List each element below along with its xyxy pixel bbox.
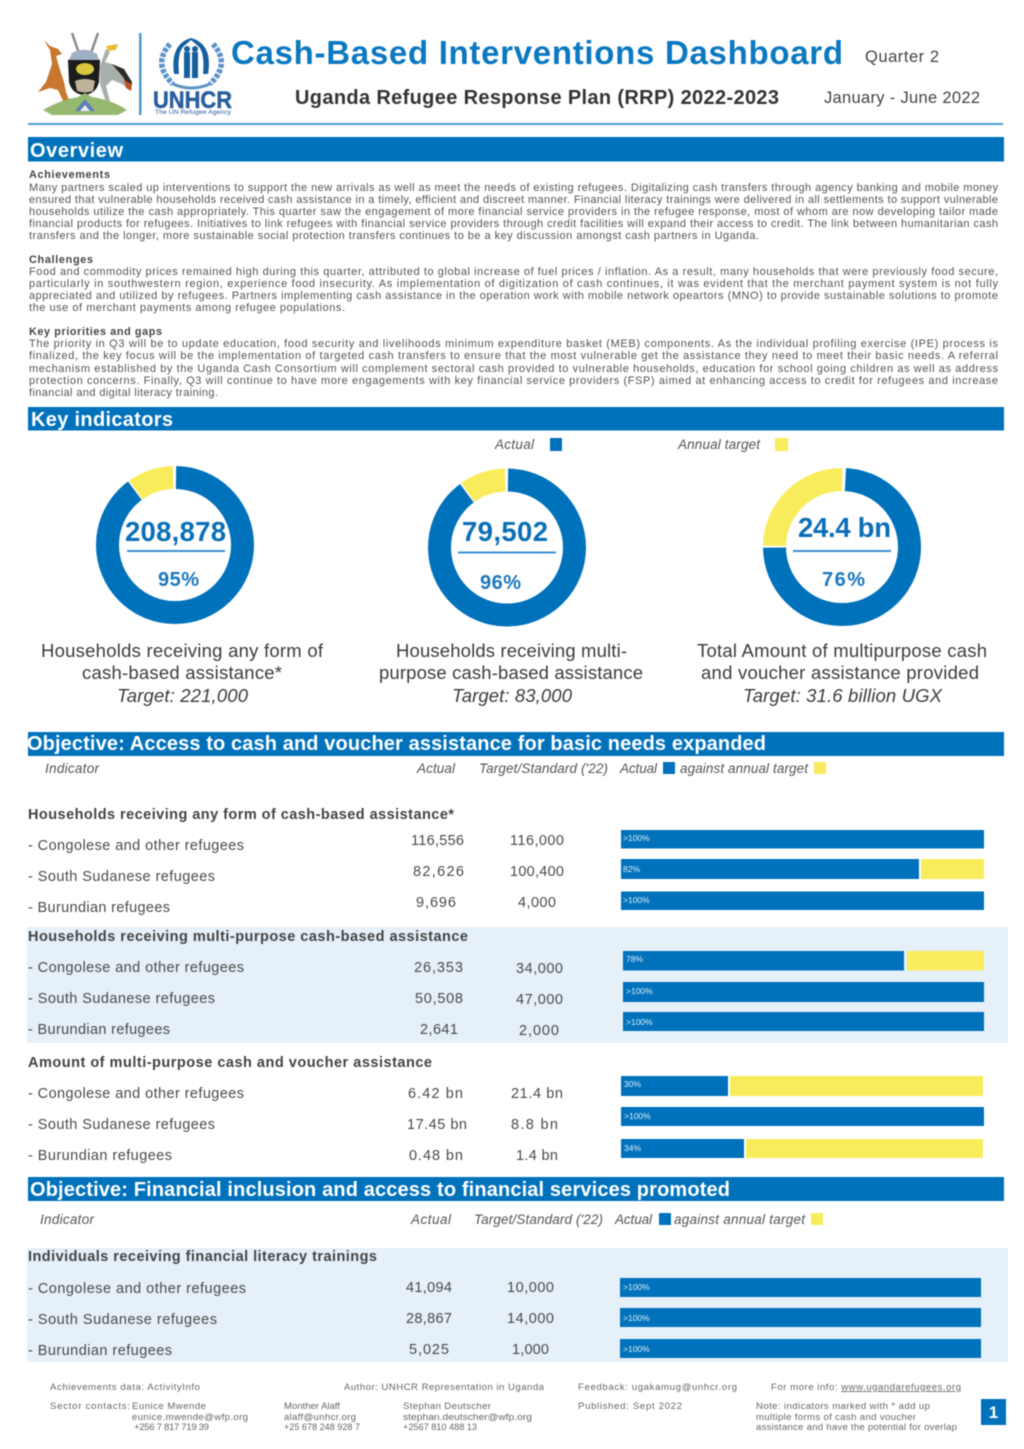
indicator group: households any form: 116,556 bbox=[411, 833, 464, 849]
indicator group: households any form: - Congolese and other refugees bbox=[28, 838, 244, 854]
legend: actual and annual target: Annual target bbox=[677, 437, 761, 452]
footer: note: assistance and have the potential for overlap bbox=[756, 1422, 957, 1433]
text block: key priorities and gaps: mechanism established by the Uganda Cash Consortium will complement sectoral cash provided to vulnerable households, education for school going children as well as address bbox=[29, 363, 999, 375]
footer: sources and links: Feedback: ugakamug@unhcr.org bbox=[578, 1382, 737, 1393]
indicator group: multi-purpose households: - Congolese and other refugees bbox=[28, 960, 244, 976]
heading: objective financial inclusion bbox=[28, 1177, 1004, 1201]
table header: Indicator bbox=[45, 761, 100, 776]
footer: note: multiple forms of cash and voucher bbox=[756, 1412, 917, 1423]
indicator group: financial literacy: 1,000 bbox=[512, 1342, 549, 1358]
heading: objective access to cash: Objective: Access to cash and voucher assistance for basic needs expanded bbox=[27, 733, 766, 755]
indicator group: financial literacy: 10,000 bbox=[507, 1280, 554, 1296]
indicator group: multi-purpose households: Households receiving multi-purpose cash-based assistance bbox=[28, 929, 468, 945]
legend: actual and annual target bbox=[494, 437, 788, 452]
indicator group: multi-purpose households: - South Sudanese refugees bbox=[28, 991, 215, 1007]
indicator group: financial literacy: - Burundian refugees bbox=[28, 1343, 172, 1359]
footer: sources and links: Author: UNHCR Representation in Uganda bbox=[344, 1382, 545, 1393]
donut: total amount: 24.4 bn bbox=[798, 512, 891, 543]
heading: objective financial inclusion: Objective: Financial inclusion and access to financial services promoted bbox=[30, 1179, 730, 1201]
table header bbox=[40, 1212, 823, 1227]
indicator group: multi-purpose households bbox=[28, 929, 984, 1039]
text block: achievements: Achievements bbox=[29, 169, 110, 181]
text block: challenges: appreciated and utilized by refugees. Partners implementing cash assistance in the operation work with mobile network opeartors (MNO) to provide sustainable solutions to promote bbox=[29, 290, 998, 302]
heading: key indicators: Key indicators bbox=[31, 409, 173, 431]
text block: key priorities and gaps: protection concerns. Finally, Q3 will continue to have more engagements with key financial service providers (FSP) aimed at enhancing access to credit for refugees and increase bbox=[29, 375, 998, 387]
indicator group: financial literacy: >100% bbox=[623, 1282, 650, 1292]
caption: multi-purpose households: Households receiving multi- bbox=[396, 640, 627, 661]
footer: sector contacts: alaff@unhcr.org bbox=[284, 1412, 356, 1423]
indicator group: households any form: 100,400 bbox=[510, 864, 564, 880]
text block: key priorities and gaps: financial and digital literacy training. bbox=[29, 387, 218, 399]
date range: January - June 2022 bbox=[824, 89, 980, 107]
indicator group: amount of assistance: - Burundian refugees bbox=[28, 1148, 172, 1164]
indicator group: multi-purpose households: 2,000 bbox=[519, 1023, 559, 1039]
caption: households any form: Target: 221,000 bbox=[117, 685, 249, 706]
title: Cash-Based Interventions Dashboard bbox=[231, 34, 843, 71]
table header: Indicator bbox=[40, 1212, 94, 1227]
indicator group: amount of assistance: 6.42 bn bbox=[408, 1086, 463, 1102]
panel: overview bbox=[28, 137, 1004, 399]
indicator group: households any form: 4,000 bbox=[518, 895, 556, 911]
caption: households any form: cash-based assistance* bbox=[82, 662, 282, 683]
footer: sector contacts: Sector contacts: bbox=[50, 1401, 130, 1412]
footer: sources and links: For more info: www.ugandarefugees.org bbox=[771, 1382, 961, 1393]
icon: Uganda coat of arms bbox=[38, 33, 132, 115]
indicator group: households any form: 82,626 bbox=[413, 864, 464, 880]
indicator group: financial literacy: >100% bbox=[623, 1344, 650, 1354]
indicator group: multi-purpose households: 34,000 bbox=[516, 961, 563, 977]
table header: Actual bbox=[614, 1212, 653, 1227]
indicator group: households any form: >100% bbox=[623, 833, 650, 843]
indicator group: households any form bbox=[28, 807, 984, 916]
subtitle: Uganda Refugee Response Plan (RRP) 2022-2023 bbox=[295, 87, 779, 109]
text block: key priorities and gaps: Key priorities and gaps bbox=[29, 326, 162, 338]
footer: note bbox=[756, 1401, 957, 1433]
caption: total amount: Target: 31.6 billion UGX bbox=[743, 685, 943, 706]
indicator group: multi-purpose households: 26,353 bbox=[414, 960, 463, 976]
caption: total amount: Total Amount of multipurpose cash bbox=[697, 640, 987, 661]
text block: challenges: particularly in southwestern region, experience food insecurity. As implementation of digitization of cash continues, it was evident that the merchant payment system is not fully bbox=[29, 278, 999, 290]
footer: sector contacts: +256 7 817 719 39 bbox=[134, 1422, 209, 1433]
table header: Actual bbox=[416, 761, 456, 776]
indicator group: multi-purpose households: 50,508 bbox=[415, 991, 463, 1007]
header bbox=[28, 33, 1003, 125]
table header: Target/Standard ('22) bbox=[479, 761, 608, 776]
footer: sector contacts: Monther Alaff bbox=[284, 1401, 340, 1412]
indicator group: amount of assistance: - South Sudanese refugees bbox=[28, 1117, 215, 1133]
donut: multi-purpose households: 79,502 bbox=[462, 516, 548, 547]
text block: key priorities and gaps: The priority in Q3 will be to update education, food security and livelihoods minimum expenditure basket (MEB) components. As the individual profiling exercise (IPE) process is bbox=[29, 338, 999, 350]
caption: households any form: Households receiving any form of bbox=[41, 640, 324, 661]
donut: multi-purpose households: 96% bbox=[480, 572, 521, 594]
table header: Target/Standard ('22) bbox=[474, 1212, 603, 1227]
text block: challenges: the use of merchant payments among refugee populations. bbox=[29, 302, 345, 314]
indicator group: financial literacy: - South Sudanese refugees bbox=[28, 1312, 217, 1328]
panel: objective financial inclusion bbox=[27, 1177, 1008, 1362]
heading: overview bbox=[28, 137, 1004, 162]
indicator group: amount of assistance: 30% bbox=[624, 1079, 641, 1089]
quarter label: Quarter 2 bbox=[865, 48, 939, 66]
indicator group: multi-purpose households: 2,641 bbox=[420, 1022, 458, 1038]
indicator group: amount of assistance: Amount of multi-purpose cash and voucher assistance bbox=[28, 1055, 432, 1071]
heading: overview: Overview bbox=[30, 140, 123, 162]
indicator group: multi-purpose households: - Burundian refugees bbox=[28, 1022, 170, 1038]
footer: sector contacts: +2567 810 488 13 bbox=[403, 1422, 477, 1433]
text block: achievements bbox=[29, 169, 999, 242]
text block: achievements: households utilize the cash appropriately. This quarter saw the engagement of more financial service providers in the refugee response, most of whom are now developing tailor made bbox=[29, 206, 998, 218]
donut: households any form: 208,878 bbox=[125, 516, 226, 547]
icon: UNHCR logo: UNHCR bbox=[153, 87, 232, 114]
text block: challenges: Challenges bbox=[29, 254, 93, 266]
text block: challenges bbox=[29, 254, 999, 314]
indicator group: amount of assistance: 17.45 bn bbox=[407, 1117, 467, 1133]
indicator group: households any form: Households receiving any form of cash-based assistance* bbox=[28, 807, 454, 823]
indicator group: households any form: 82% bbox=[623, 864, 640, 874]
indicator group: amount of assistance bbox=[28, 1055, 984, 1164]
footer: sector contacts: Eunice Mwende bbox=[132, 1401, 206, 1412]
text block: challenges: Food and commodity prices remained high during this quarter, attributed to global increase of fuel prices / inflation. As a result, many households that were previously food secure, bbox=[29, 266, 998, 278]
indicator group: amount of assistance: >100% bbox=[624, 1111, 651, 1121]
page number: 1 bbox=[989, 1403, 998, 1422]
indicator group: households any form: 116,000 bbox=[510, 833, 564, 849]
footer: sector contacts: eunice.mwende@wfp.org bbox=[132, 1412, 248, 1423]
icon: UNHCR logo: The UN Refugee Agency bbox=[155, 110, 231, 116]
indicator group: amount of assistance: 21.4 bn bbox=[511, 1086, 563, 1102]
caption: households any form bbox=[41, 640, 324, 706]
indicator group: multi-purpose households: 78% bbox=[626, 954, 643, 964]
footer: sources and links: Achievements data: ActivityInfo bbox=[50, 1382, 200, 1393]
indicator group: financial literacy: 28,867 bbox=[406, 1311, 452, 1327]
indicator group: financial literacy bbox=[28, 1249, 981, 1359]
donut: multi-purpose households bbox=[413, 453, 601, 642]
heading: key indicators bbox=[28, 407, 1004, 431]
footer: sector contacts: stephan.deutscher@wfp.org bbox=[403, 1412, 532, 1423]
indicator group: multi-purpose households: 47,000 bbox=[516, 992, 563, 1008]
caption: multi-purpose households: Target: 83,000 bbox=[452, 685, 573, 706]
donut: total amount: 76% bbox=[822, 569, 865, 591]
footer: published date: Published: Sept 2022 bbox=[578, 1401, 682, 1412]
footer: sector contacts: +25 678 248 928 7 bbox=[284, 1422, 360, 1433]
indicator group: households any form: - Burundian refugees bbox=[28, 900, 170, 916]
icon: UNHCR logo bbox=[153, 38, 232, 116]
indicator group: households any form: - South Sudanese refugees bbox=[28, 869, 215, 885]
text block: key priorities and gaps bbox=[29, 326, 999, 399]
page number bbox=[981, 1399, 1006, 1425]
indicator group: financial literacy: >100% bbox=[623, 1313, 650, 1323]
text block: achievements: financial products for refugees. Initiatives to link refugees with financial service providers through credit facilities will expand their access to credit. The link between humanitarian cash bbox=[29, 218, 998, 230]
indicator group: amount of assistance: 1.4 bn bbox=[516, 1148, 558, 1164]
text block: achievements: transfers and the longer, more sustainable social protection transfers continues to be a key discussion amongst cash partners in Uganda. bbox=[29, 230, 759, 242]
caption: total amount: and voucher assistance provided bbox=[701, 662, 979, 683]
legend: actual and annual target: Actual bbox=[494, 437, 535, 452]
caption: total amount bbox=[697, 640, 987, 706]
text block: achievements: Many partners scaled up interventions to support the new arrivals as well as meet the needs of existing refugees. Digitalizing cash transfers through agency banking and mobile money bbox=[29, 182, 999, 194]
panel: key indicators bbox=[28, 407, 1004, 706]
indicator group: amount of assistance: 0.48 bn bbox=[409, 1148, 463, 1164]
table header: against annual target bbox=[680, 761, 809, 776]
footer: sector contacts bbox=[50, 1401, 532, 1433]
table header: against annual target bbox=[674, 1212, 806, 1227]
donut: households any form bbox=[81, 451, 269, 639]
footer: sources and links bbox=[50, 1382, 961, 1393]
indicator group: amount of assistance: 34% bbox=[624, 1143, 641, 1153]
indicator group: households any form: 9,696 bbox=[416, 895, 456, 911]
table header: Actual bbox=[619, 761, 658, 776]
indicator group: multi-purpose households: >100% bbox=[626, 1017, 653, 1027]
donut: households any form: 95% bbox=[158, 569, 199, 591]
panel: objective basic needs bbox=[27, 732, 1008, 1164]
table header bbox=[45, 761, 826, 776]
text block: achievements: ensured that vulnerable households received cash assistance in a timely, efficient and discreet manner. Financial literacy trainings were delivered in all settlements to support vulnerable bbox=[29, 194, 998, 206]
indicator group: multi-purpose households: >100% bbox=[626, 986, 653, 996]
caption: multi-purpose households: purpose cash-based assistance bbox=[379, 662, 643, 683]
footer: note: Note: indicators marked with * add up bbox=[756, 1401, 930, 1412]
indicator group: amount of assistance: - Congolese and other refugees bbox=[28, 1086, 244, 1102]
table header: Actual bbox=[410, 1212, 452, 1227]
donut: total amount bbox=[773, 478, 911, 616]
indicator group: financial literacy: - Congolese and other refugees bbox=[28, 1281, 246, 1297]
footer bbox=[50, 1382, 1006, 1433]
indicator group: financial literacy: Individuals receiving financial literacy trainings bbox=[28, 1249, 377, 1265]
heading: objective access to cash bbox=[27, 732, 1004, 756]
indicator group: financial literacy: 14,000 bbox=[507, 1311, 554, 1327]
footer: sector contacts: Stephan Deutscher bbox=[403, 1401, 492, 1412]
indicator group: amount of assistance: 8.8 bn bbox=[511, 1117, 558, 1133]
indicator group: financial literacy: 5,025 bbox=[409, 1342, 449, 1358]
indicator group: households any form: >100% bbox=[623, 895, 650, 905]
caption: multi-purpose households bbox=[379, 640, 643, 706]
text block: key priorities and gaps: finalized, the key focus will be the implementation of targeted cash transfers to ensure that the most vulnerable get the assistance they need to meet their basic needs. A referral bbox=[29, 350, 998, 362]
indicator group: financial literacy: 41,094 bbox=[406, 1280, 452, 1296]
